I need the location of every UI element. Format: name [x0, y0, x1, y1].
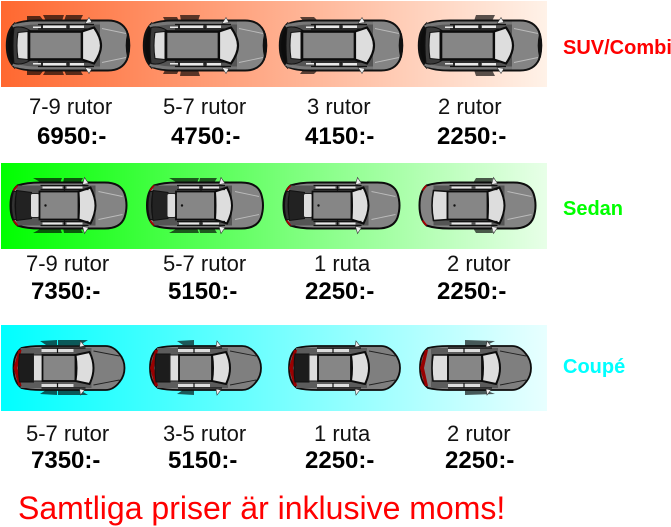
- car: SUV 2 windows: [419, 15, 542, 76]
- labels: Coupé prices: [26, 421, 514, 474]
- car: SUV 5-7 windows: [144, 15, 266, 76]
- price: 5150: 5150:-: [168, 278, 237, 305]
- label: Coupé 1: 1 ruta: [314, 421, 371, 446]
- heading: Sedan: Sedan: [563, 198, 623, 220]
- car: Coupé 3-5 windows: [150, 340, 261, 395]
- heading: SUV/Combi: SUV/Combi: [563, 37, 671, 59]
- car: Coupé 1 window: [289, 341, 400, 395]
- car: Sedan 5-7 windows: [147, 178, 263, 234]
- label: Sedan 2: 2 rutor: [447, 251, 511, 276]
- label: SUV 7-9: 7-9 rutor: [29, 94, 112, 119]
- panel: Sedan: [1, 163, 623, 249]
- label: Coupé 5-7: 5-7 rutor: [26, 421, 109, 446]
- car: Sedan 2 windows: [420, 178, 536, 234]
- band: SUV gradient: [1, 1, 547, 87]
- labels: Sedan prices: [26, 251, 511, 305]
- panel: SUV/Combi: [1, 1, 671, 87]
- car: Coupé 2 windows: [420, 340, 531, 395]
- car: SUV 3 windows: [280, 17, 402, 74]
- price: 2250: 2250:-: [445, 447, 514, 474]
- car: Coupé 5-7 windows: [14, 340, 124, 395]
- label: Sedan 1: 1 ruta: [314, 251, 371, 276]
- label: Coupé 3-5: 3-5 rutor: [163, 421, 246, 446]
- price: 7350: 7350:-: [31, 447, 100, 474]
- price: 4150: 4150:-: [305, 123, 374, 150]
- price: 2250: 2250:-: [437, 278, 506, 305]
- label: SUV 3: 3 rutor: [307, 94, 371, 119]
- label: Sedan 5-7: 5-7 rutor: [163, 251, 246, 276]
- panel: Coupé: [1, 325, 625, 411]
- price: 2250: 2250:-: [437, 123, 506, 150]
- price: 2250: 2250:-: [305, 447, 374, 474]
- band: Coupé gradient: [1, 325, 547, 411]
- price: 2250: 2250:-: [305, 278, 374, 305]
- labels: SUV prices: [29, 94, 506, 150]
- heading: Coupé: Coupé: [563, 356, 625, 378]
- label: SUV 2: 2 rutor: [438, 94, 502, 119]
- car: SUV 7-9 windows: [7, 15, 130, 75]
- price: 4750: 4750:-: [171, 123, 240, 150]
- label: Coupé 2: 2 rutor: [447, 421, 511, 446]
- car: Sedan 1 window: [284, 178, 400, 234]
- footer note: Samtliga priser är inklusive moms!: [18, 490, 505, 526]
- label: Sedan 7-9: 7-9 rutor: [26, 251, 109, 276]
- price: 6950: 6950:-: [37, 123, 106, 150]
- price: 7350: 7350:-: [31, 278, 100, 305]
- car: Sedan 7-9 windows: [10, 178, 126, 234]
- label: SUV 5-7: 5-7 rutor: [163, 94, 246, 119]
- price: 5150: 5150:-: [168, 447, 237, 474]
- band: Sedan gradient: [1, 163, 547, 249]
